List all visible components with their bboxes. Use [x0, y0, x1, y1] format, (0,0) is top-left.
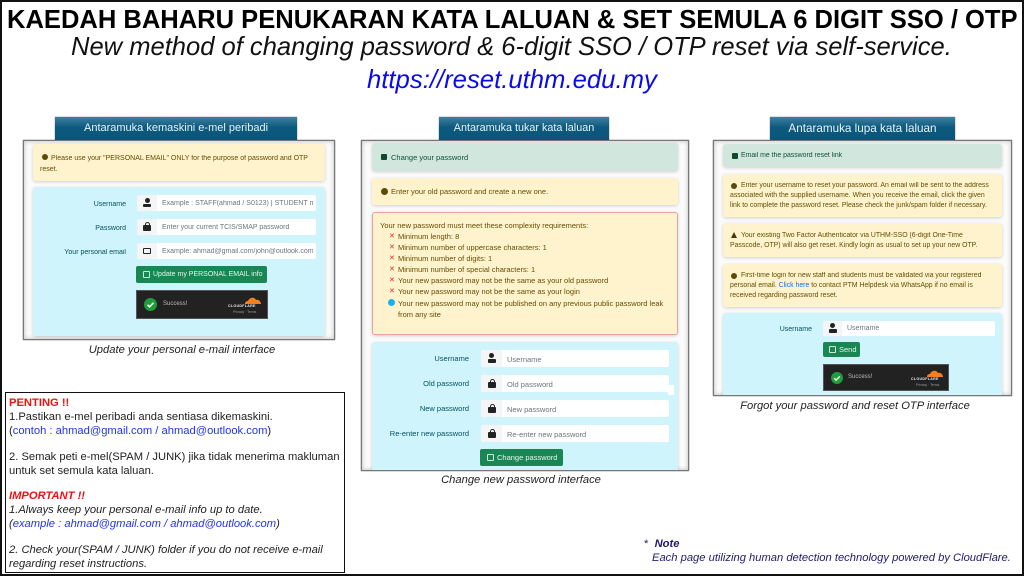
panel: important notes	[5, 392, 345, 573]
field: username	[481, 350, 669, 367]
icon: cloud	[245, 298, 261, 304]
requirement items: ✕	[389, 277, 395, 284]
panel: personal e-mail heading tab: Antaramuka kemaskini e-mel peribadi	[84, 122, 268, 134]
cloudflare wordmark: CLOUDFLARE	[911, 377, 939, 381]
footnote: cloudflare note	[644, 538, 1011, 564]
requirement items: ✕	[389, 266, 395, 273]
panel: forgot password heading tab	[770, 117, 955, 140]
field: username: Username	[847, 325, 879, 332]
Malay point 2: 2. Semak peti e-mel(SPAM / JUNK) jika tidak menerima makluman	[9, 451, 340, 463]
requirement items: ✕	[389, 233, 395, 240]
form: change password	[372, 342, 678, 482]
Malay point 1: 1.Pastikan e-mel peribadi anda sentiasa dikemaskini.	[9, 411, 273, 423]
panel: personal e-mail interface	[23, 140, 335, 340]
field: password	[137, 219, 316, 235]
notice: two factor reset: Passcode, OTP) will also get reset. Kindly login as usual to set up your new OTP.	[730, 242, 977, 249]
notice: personal email only: Please use your "PERSONAL EMAIL" ONLY for the purpose of password and OTP reset.	[40, 155, 308, 173]
label: username: Username	[94, 201, 126, 208]
notice: first-time login	[723, 264, 1002, 307]
field: password: Enter your current TCIS/SMAP password	[162, 224, 289, 231]
cloudflare wordmark: CLOUDFLARE	[228, 304, 256, 308]
requirement items: from any site	[398, 310, 441, 319]
icon: success check	[144, 298, 157, 311]
success text: Success!	[848, 374, 872, 380]
heading: penting: PENTING !!	[9, 397, 69, 409]
subtitle: New method of changing password & 6-digit SSO / OTP reset via self-service.	[71, 33, 952, 61]
panel: change password heading tab	[439, 117, 609, 140]
panel: change password interface	[361, 140, 689, 471]
field: new password: New password	[507, 405, 556, 414]
field: old password	[481, 375, 669, 392]
requirement items: Minimum number of digits: 1	[398, 254, 492, 263]
English point 2: 2. Check your(SPAM / JUNK) folder if you do not receive e-mail	[9, 544, 323, 556]
requirement items: Your new password may not be the same as your login	[398, 287, 580, 296]
panel: forgot password interface	[713, 140, 1012, 396]
Malay point 2	[9, 451, 340, 476]
white notch	[668, 385, 674, 395]
notice: enter username: link to complete the password reset. Please check the junk/spam folder if necessary.	[730, 202, 987, 209]
requirement items: Minimum length: 8	[398, 232, 459, 241]
field: username	[137, 195, 316, 211]
field: username: Username	[507, 355, 542, 364]
panel: forgot password heading tab: Antaramuka lupa kata laluan	[788, 122, 937, 135]
English point 2: regarding reset instructions.	[9, 558, 147, 570]
widget: cloudflare success	[136, 290, 268, 319]
notice: change your password: Change your password	[391, 153, 468, 162]
url link: https://reset.uthm.edu.my	[367, 66, 657, 94]
field: username	[823, 321, 995, 336]
English point 1: (example : ahmad@gmail.com / ahmad@outlook.com)	[9, 518, 280, 530]
notice: first-time login: received regarding password reset.	[730, 292, 838, 299]
notice: first-time login: personal email. Click here to contact PTM Helpdesk via WhatsApp if no email is	[730, 282, 973, 289]
requirement items: ✕	[389, 255, 395, 262]
field: re-enter password: Re-enter new password	[507, 430, 586, 439]
title: KAEDAH BAHARU PENUKARAN KATA LALUAN & SET SEMULA 6 DIGIT SSO / OTP	[7, 6, 1018, 34]
requirement items: ✕	[389, 244, 395, 251]
success text: Success!	[163, 301, 187, 307]
label: re-enter password: Re-enter new password	[390, 429, 469, 438]
notice: enter username: associated with the supplied username. When you receive the email, click the given	[730, 192, 985, 199]
requirements list	[372, 212, 678, 335]
notice: email reset link	[723, 144, 1002, 167]
requirement items	[388, 232, 664, 319]
English point 1	[9, 504, 280, 530]
requirement items: Your new password may not be the same as your old password	[398, 276, 608, 285]
requirement items: ✕	[389, 288, 395, 295]
notice: two factor reset	[723, 223, 1002, 257]
label: password: Password	[95, 225, 126, 232]
requirements heading: Your new password must meet these complexity requirements:	[380, 221, 588, 230]
field: new password	[481, 400, 669, 417]
field: personal email	[137, 243, 316, 259]
notice: two factor reset: Your existing Two Factor Authenticator via UTHM-SSO (6-digit One-Time	[741, 232, 963, 239]
notice: enter username: Enter your username to reset your password. An email will be sent to the address	[741, 182, 989, 189]
notice: personal email only	[33, 144, 325, 181]
button: update email: Update my PERSONAL EMAIL info	[153, 271, 263, 278]
notice: enter old password	[372, 178, 678, 205]
notice: change your password	[372, 143, 678, 171]
icon: success check	[831, 372, 843, 384]
note text: Malay and English	[8, 397, 340, 570]
requirement items: Minimum number of uppercase characters: 1	[398, 243, 547, 252]
English point 2	[8, 544, 323, 570]
label: username: Username	[434, 354, 469, 363]
label: personal email: Your personal email	[64, 249, 126, 256]
Malay point 1: (contoh : ahmad@gmail.com / ahmad@outlook.com)	[9, 425, 271, 437]
privacy links: Privacy · Terms	[916, 383, 939, 387]
caption: personal email: Update your personal e-mail interface	[89, 344, 275, 356]
footnote body: Each page utilizing human detection technology powered by CloudFlare.	[652, 552, 1011, 564]
button: update email	[136, 266, 267, 283]
button: send: Send	[839, 345, 857, 354]
icon: cloud	[927, 370, 943, 377]
caption: forgot password: Forgot your password and reset OTP interface	[740, 400, 970, 412]
field: re-enter password	[481, 425, 669, 442]
privacy links: Privacy · Terms	[233, 310, 256, 314]
button: send	[823, 342, 860, 357]
form: forgot password	[723, 313, 1002, 403]
notice: email reset link: Email me the password reset link	[741, 152, 842, 159]
notice: first-time login: First-time login for new staff and students must be validated via your registered	[741, 272, 981, 279]
field: old password: Old password	[507, 380, 553, 389]
label: username: Username	[780, 326, 812, 333]
heading: important: IMPORTANT !!	[9, 490, 85, 502]
form: update email	[33, 187, 325, 336]
field: personal email: Example: ahmad@gmail.com/john@outlook.com	[162, 248, 313, 255]
requirement items: Your new password may not be published on any previous public password leak	[398, 299, 663, 308]
button: change password	[480, 449, 563, 466]
Malay point 1	[9, 411, 273, 437]
caption: change password: Change new password interface	[441, 474, 601, 486]
English point 1: 1.Always keep your personal e-mail info up to date.	[9, 504, 263, 516]
requirement items: Minimum number of special characters: 1	[398, 265, 535, 274]
panel: personal e-mail heading tab	[55, 117, 297, 140]
notice: enter username	[723, 174, 1002, 217]
button: change password: Change password	[497, 453, 557, 462]
label: old password: Old password	[423, 379, 469, 388]
label: new password: New password	[420, 404, 469, 413]
widget: cloudflare success	[823, 364, 949, 391]
footnote heading: * Note	[644, 538, 679, 550]
Malay point 2: untuk set semula kata laluan.	[9, 464, 154, 476]
notice: enter old password: Enter your old password and create a new one.	[391, 187, 548, 196]
panel: change password heading tab: Antaramuka tukar kata laluan	[454, 122, 594, 134]
